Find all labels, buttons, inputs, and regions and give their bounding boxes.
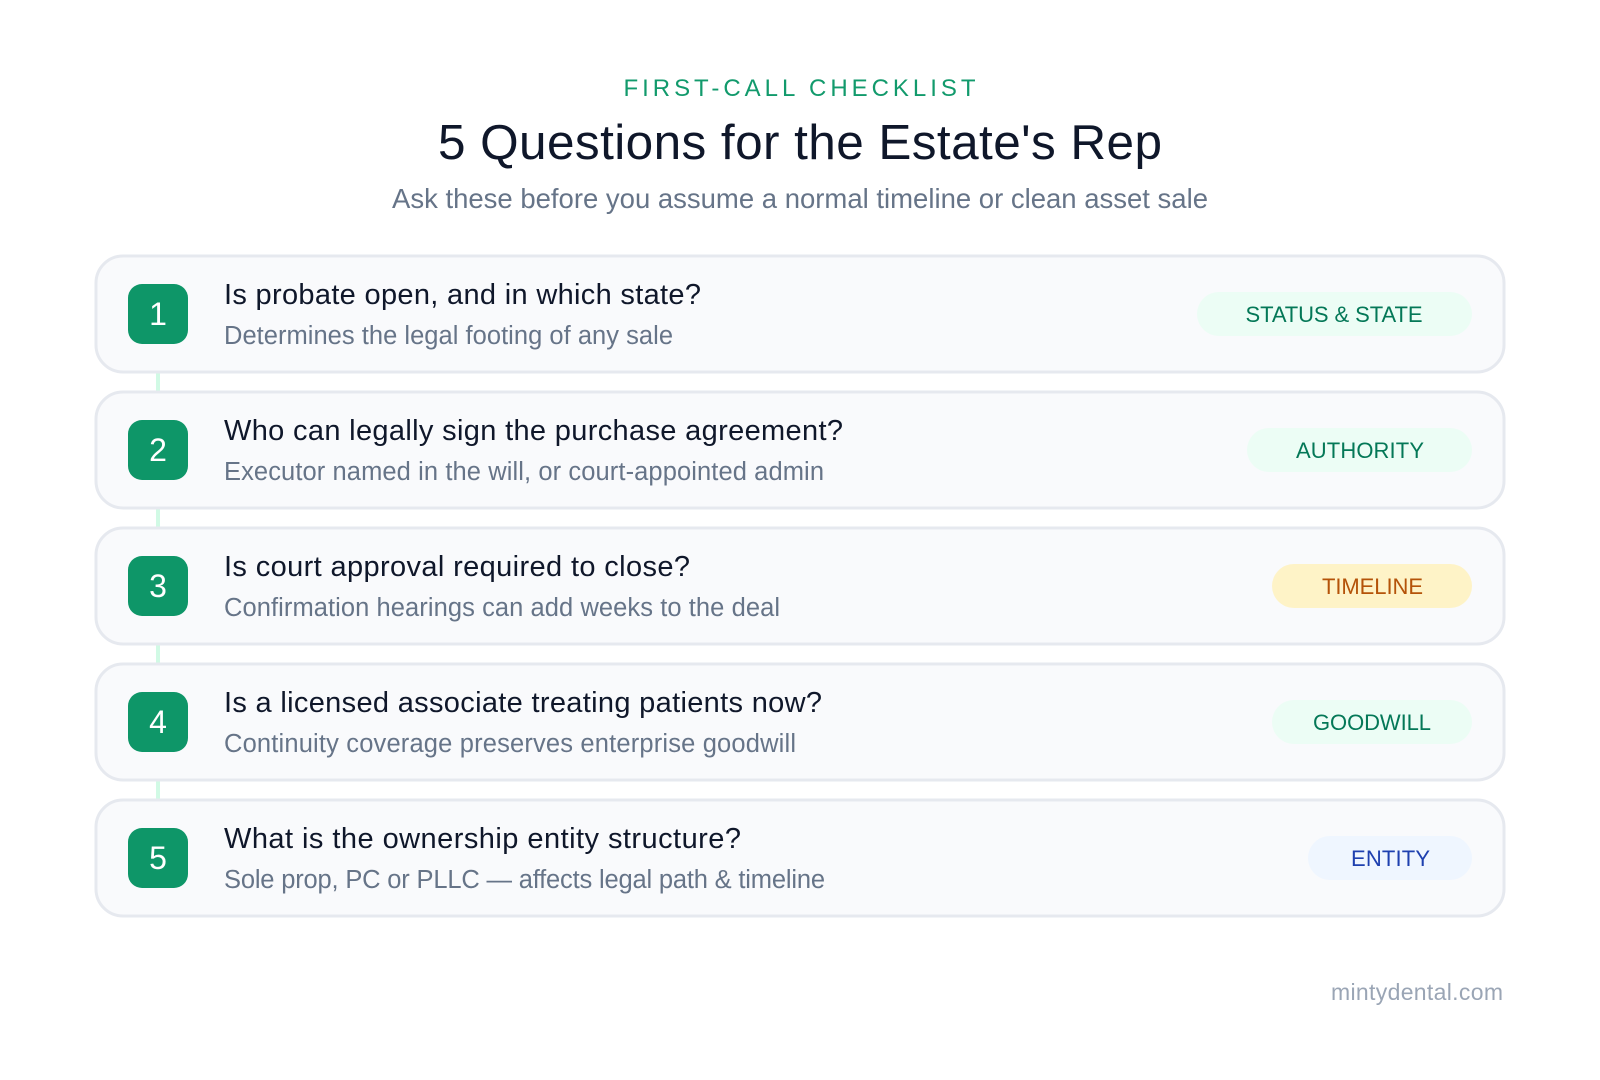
number badge 4: 4 [149, 704, 167, 740]
subtitle: Ask these before you assume a normal timeline or clean asset sale [392, 183, 1208, 214]
number badge 1: 1 [149, 296, 167, 332]
connector 3-4 [156, 644, 160, 664]
connector 4-5 [156, 780, 160, 800]
card background [96, 664, 1504, 780]
number badge 2 [128, 420, 188, 480]
number badge 4 [128, 692, 188, 752]
detail 2: Executor named in the will, or court-appointed admin [224, 458, 824, 486]
tag: status and state: STATUS & STATE [1246, 302, 1422, 327]
detail 1: Determines the legal footing of any sale [224, 322, 673, 350]
detail 4: Continuity coverage preserves enterprise goodwill [224, 730, 796, 758]
eyebrow heading: FIRST-CALL CHECKLIST [624, 75, 976, 102]
panel: question 1 [96, 256, 1504, 372]
question 4: Is a licensed associate treating patients now? [224, 687, 822, 719]
question 1: Is probate open, and in which state? [224, 279, 701, 311]
footer source: mintydental.com [1331, 979, 1503, 1005]
panel: question 4 [96, 664, 1504, 780]
tag: entity [1308, 836, 1472, 880]
card background [96, 392, 1504, 508]
question 3: Is court approval required to close? [224, 551, 690, 583]
detail 3: Confirmation hearings can add weeks to the deal [224, 594, 780, 622]
title: 5 Questions for the Estate's Rep [438, 115, 1162, 170]
number badge 2: 2 [149, 432, 167, 468]
number badge 3 [128, 556, 188, 616]
card background [96, 528, 1504, 644]
tag: authority: AUTHORITY [1296, 438, 1424, 463]
detail 5: Sole prop, PC or PLLC — affects legal path & timeline [224, 866, 825, 894]
tag: timeline: TIMELINE [1322, 574, 1423, 599]
tag: entity: ENTITY [1351, 846, 1430, 871]
panel: question 3 [96, 528, 1504, 644]
tag: goodwill: GOODWILL [1313, 710, 1431, 735]
tag: status and state [1197, 292, 1472, 336]
connector 1-2 [156, 372, 160, 392]
tag: timeline [1272, 564, 1472, 608]
panel: question 2 [96, 392, 1504, 508]
question 2: Who can legally sign the purchase agreement? [224, 415, 843, 447]
card background [96, 256, 1504, 372]
number badge 5: 5 [149, 840, 167, 876]
number badge 3: 3 [149, 568, 167, 604]
tag: goodwill [1272, 700, 1472, 744]
question 5: What is the ownership entity structure? [224, 823, 741, 855]
number badge 1 [128, 284, 188, 344]
card background [96, 800, 1504, 916]
number badge 5 [128, 828, 188, 888]
panel: question 5 [96, 800, 1504, 916]
tag: authority [1247, 428, 1472, 472]
connector 2-3 [156, 508, 160, 528]
